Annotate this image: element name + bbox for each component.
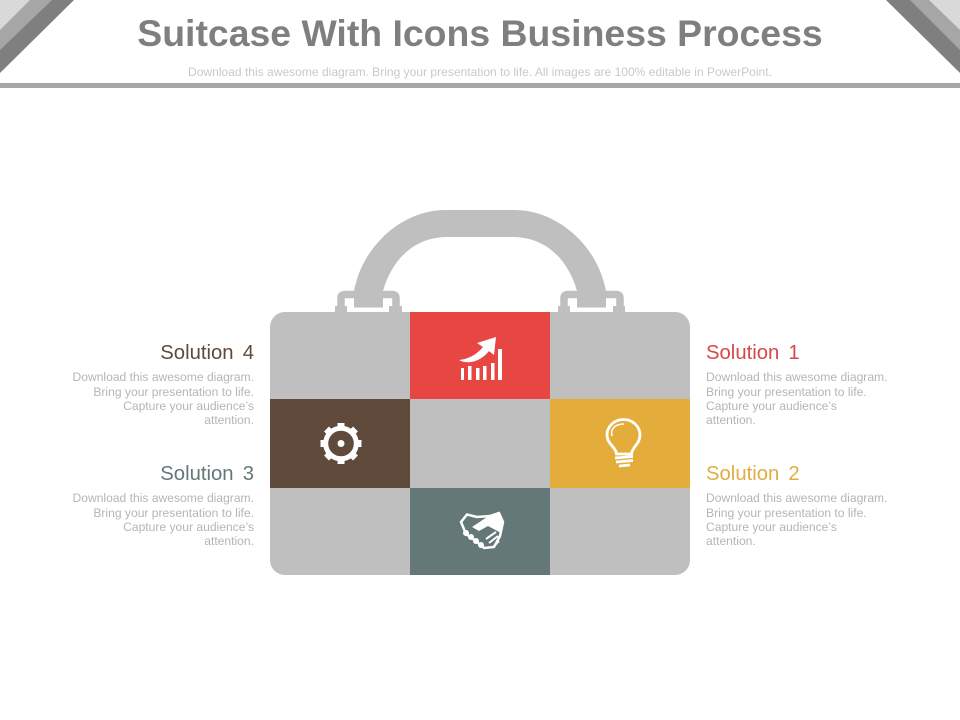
panel: solution 4 brown tile (270, 399, 410, 488)
top-right corner decoration (886, 0, 960, 73)
suitcase body (270, 312, 690, 575)
text block: solution 2 (706, 463, 888, 548)
text block: solution 1: attention. (706, 413, 756, 427)
panel: solution 1 red tile (410, 312, 550, 399)
subtitle: Download this awesome diagram. Bring your presentation to life. All images are 100% editable in PowerPoint. (188, 65, 772, 79)
panel: solution 2 yellow tile (550, 399, 690, 488)
text block: solution 1: Download this awesome diagram. (706, 370, 888, 384)
text block: solution 1 (706, 342, 888, 427)
text block: solution 2: attention. (706, 534, 756, 548)
title: Suitcase With Icons Business Process (137, 12, 823, 54)
text block: solution 4: attention. (204, 413, 254, 427)
text block: solution 2: Download this awesome diagram. (706, 491, 888, 505)
text block: solution 1: Bring your presentation to life. (706, 385, 867, 399)
text block: solution 2: Capture your audience’s (706, 520, 837, 534)
icon: growth chart (459, 337, 502, 380)
suitcase (270, 210, 690, 575)
header rule (0, 83, 960, 88)
left handle bracket (335, 294, 402, 312)
text block: solution 2: Solution 2 (706, 463, 800, 485)
text block: solution 3: attention. (204, 534, 254, 548)
text block: solution 2: Bring your presentation to life. (706, 506, 867, 520)
text block: solution 3: Bring your presentation to life. (93, 506, 254, 520)
panel: solution 3 slate tile (410, 488, 550, 575)
text block: solution 1: Solution 1 (706, 342, 800, 364)
text block: solution 3: Capture your audience’s (123, 520, 254, 534)
icon: gear (320, 423, 362, 464)
text block: solution 4: Solution 4 (160, 342, 254, 364)
text block: solution 4: Capture your audience’s (123, 399, 254, 413)
text block: solution 3: Solution 3 (160, 463, 254, 485)
right handle bracket (558, 294, 625, 312)
text block: solution 1: Capture your audience’s (706, 399, 837, 413)
text block: solution 4: Bring your presentation to life. (93, 385, 254, 399)
icon: light bulb (607, 420, 640, 466)
text block: solution 4: Download this awesome diagram. (72, 370, 254, 384)
suitcase handle (354, 210, 606, 308)
icon: handshake (461, 512, 504, 548)
text block: solution 3: Download this awesome diagram. (72, 491, 254, 505)
text block: solution 3 (72, 463, 254, 548)
text block: solution 4 (72, 342, 254, 427)
top-left corner decoration (0, 0, 74, 73)
